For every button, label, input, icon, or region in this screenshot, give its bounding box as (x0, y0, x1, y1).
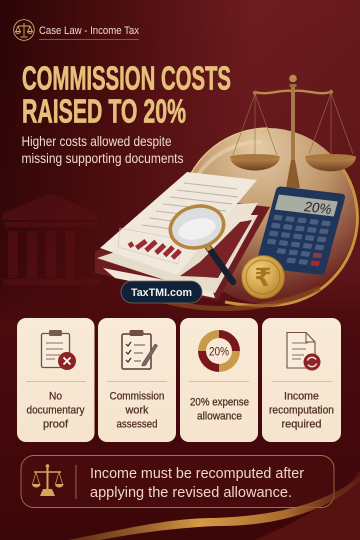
subtitle (22, 134, 184, 166)
balance scale (230, 75, 356, 188)
title: RAISED TO 20% (22, 94, 186, 130)
brand pill: TaxTMI.com (131, 287, 192, 299)
card label: Income (284, 390, 319, 402)
card label: documentary (26, 404, 85, 416)
card label: proof (43, 418, 68, 430)
subtitle: missing supporting documents (22, 151, 184, 166)
card label: Commission (110, 390, 165, 402)
header label: Case Law - Income Tax (39, 25, 139, 37)
callout text: Income must be recomputed after (90, 465, 304, 482)
card label (110, 390, 165, 430)
top report page with chart (100, 172, 257, 275)
faint courthouse silhouette (2, 193, 99, 285)
card label: assessed (116, 418, 158, 430)
card: 20% expense allowance (180, 318, 258, 442)
rupee coin: ₹ (254, 263, 272, 292)
callout text: applying the revised allowance. (90, 484, 292, 501)
card label (190, 396, 249, 422)
card label (269, 390, 334, 430)
icon: scales (32, 464, 64, 496)
card: no documentary proof (17, 318, 94, 442)
gold swoosh (68, 476, 360, 540)
card: commission work assessed (98, 318, 176, 442)
golden disc (150, 128, 357, 309)
magnifying glass (166, 201, 233, 282)
donut chart: 20% (209, 346, 229, 358)
red folder and paper stack (95, 203, 270, 300)
header badge (14, 20, 139, 40)
brand pill (121, 281, 202, 303)
card label: required (282, 418, 322, 430)
icon: clipboard with cross (42, 330, 76, 370)
icon: checklist and pencil (122, 330, 158, 369)
rupee coin (242, 256, 284, 298)
callout text (90, 465, 304, 501)
card label: work (124, 404, 149, 416)
card: income recomputation required (262, 318, 341, 442)
subtitle: Higher costs allowed despite (22, 134, 172, 149)
title: COMMISSION COSTS (22, 60, 231, 98)
card label: No (49, 390, 62, 402)
card label: allowance (197, 410, 242, 422)
calculator (255, 186, 346, 275)
title (22, 60, 231, 130)
calculator: 20% (303, 199, 334, 217)
callout (21, 456, 334, 508)
card label: 20% expense (190, 396, 249, 408)
icon: document with refresh (287, 332, 320, 370)
card label (26, 390, 85, 430)
icon: scales badge (14, 20, 34, 40)
card label: recomputation (269, 404, 334, 416)
illustration (95, 75, 357, 309)
